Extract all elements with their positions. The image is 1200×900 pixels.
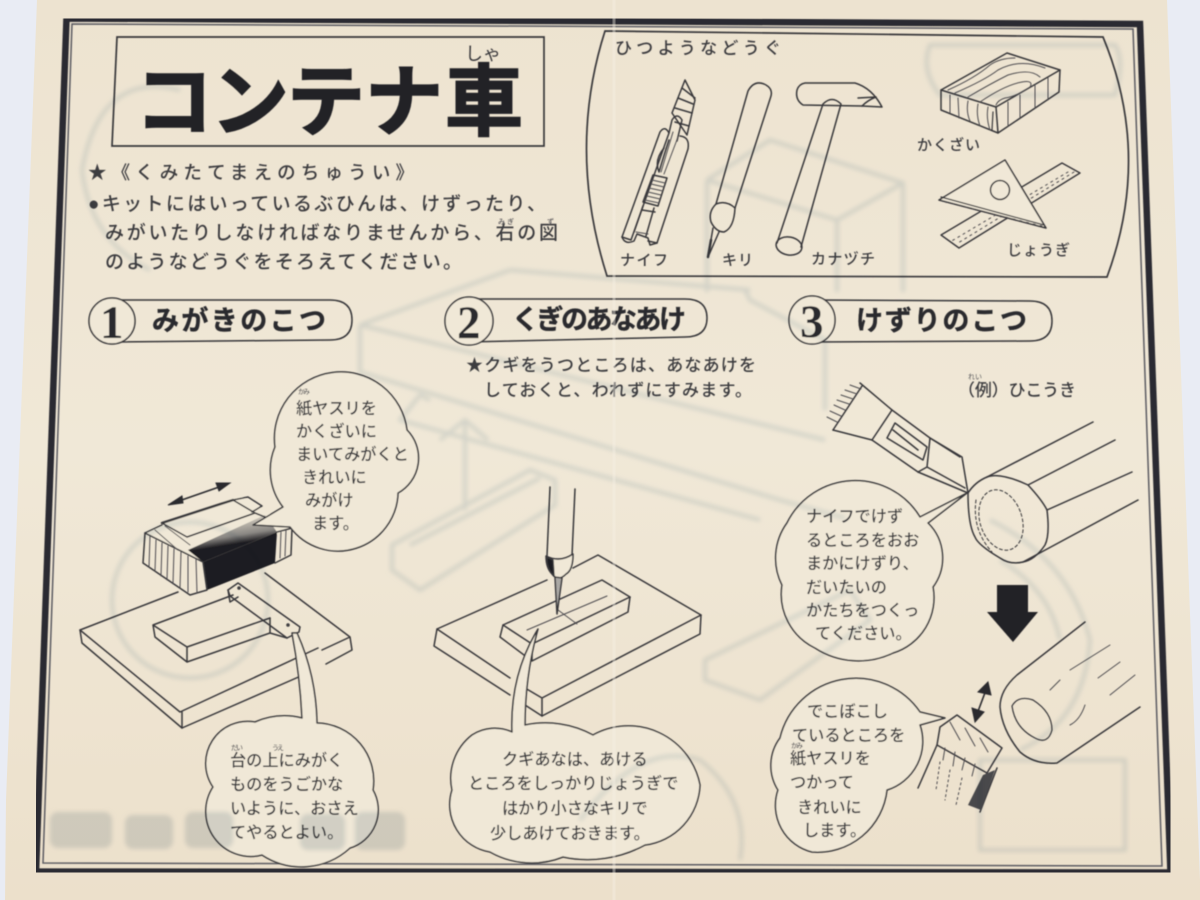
callout: wrap sandpaper around block — [253, 372, 419, 551]
callout: mark and pre-drill: ところをしっかりじょうぎで — [468, 775, 678, 793]
icon: hammer — [775, 83, 882, 257]
callout: hold the piece on the base — [206, 633, 378, 867]
tool labels: キリ — [722, 252, 753, 269]
callout: smooth with sandpaper: つかって — [790, 774, 854, 792]
callout: wrap sandpaper around block: かみ — [298, 388, 310, 396]
callout: hold the piece on the base: てやるとよい。 — [230, 824, 343, 842]
step 2 header: nail holes: 2 — [457, 297, 480, 349]
step 2 header: nail holes: くぎのあなあけ — [512, 304, 686, 335]
step 3 header: carving tips — [789, 296, 1052, 348]
step 1 header: polishing tips: 1 — [100, 297, 124, 349]
icon: wood block — [941, 53, 1060, 133]
icon: awl — [708, 83, 771, 257]
callout: wrap sandpaper around block: みがけ — [305, 491, 354, 510]
callout: wrap sandpaper around block: きれいに — [302, 469, 367, 487]
icon: knife — [622, 80, 695, 245]
callout: mark and pre-drill: 少しあけておきます。 — [490, 825, 650, 843]
callout: rough carve with the knife: だいたいの — [806, 579, 887, 597]
base board — [434, 555, 701, 716]
callout: hold the piece on the base: 台の上にみがく — [230, 751, 343, 770]
callout: mark and pre-drill — [450, 629, 700, 863]
example label: plane: れい — [968, 373, 982, 381]
illustration: sanding on a base board — [80, 483, 352, 728]
callout: rough carve with the knife: かたちをつくっ — [806, 602, 919, 620]
small workpiece — [500, 580, 630, 661]
rounded log — [1000, 622, 1140, 763]
callout: smooth with sandpaper: でこぼこし — [807, 703, 888, 721]
small workpiece — [153, 595, 270, 662]
callout: smooth with sandpaper: 紙ヤスリを — [790, 750, 871, 768]
step 2 note: しておくと、われずにすみます。 — [484, 381, 752, 400]
step 3 header: carving tips: けずりのこつ — [856, 306, 1027, 336]
precautions body text — [88, 193, 558, 273]
clamp bar — [228, 583, 300, 638]
step 1 header: polishing tips — [89, 297, 352, 349]
wood block with sandpaper — [143, 495, 292, 595]
callout: rough carve with the knife: まかにけずり、 — [806, 555, 919, 573]
awl — [546, 487, 575, 614]
step 2 note — [466, 356, 756, 400]
illustration: carving with a knife — [827, 383, 1140, 812]
precautions body text: みぎ — [498, 217, 514, 226]
tool labels: カナヅチ — [811, 251, 875, 268]
callout: wrap sandpaper around block: ます。 — [312, 515, 359, 533]
tool labels: かくざい — [917, 136, 980, 154]
title box — [112, 37, 544, 146]
precautions body text: のようなどうぐをそろえてください。 — [105, 251, 462, 273]
callout: smooth with sandpaper: かみ — [791, 742, 803, 750]
base board — [80, 573, 352, 728]
precautions body text: みがいたりしなければなりませんから、右の図 — [105, 222, 558, 244]
callout: wrap sandpaper around block: 紙ヤスリを — [296, 400, 377, 418]
tool labels: ナイフ — [620, 252, 668, 269]
precautions heading: ★《くみたてまえのちゅうい》 — [88, 162, 414, 183]
title reading: しゃ — [465, 44, 501, 64]
callout: mark and pre-drill: クギあなは、あける — [502, 751, 648, 769]
tool labels: じょうぎ — [1007, 242, 1070, 259]
callout: mark and pre-drill: はかり小さなキリで — [502, 800, 648, 818]
paper fold line — [612, 0, 616, 900]
sanding block — [918, 715, 1002, 812]
motion arrow — [972, 682, 991, 722]
callout: rough carve with the knife — [776, 481, 967, 661]
precautions body text: ず — [547, 217, 554, 226]
step 2 header: nail holes — [445, 297, 707, 349]
callout: wrap sandpaper around block: まいてみがくと — [296, 445, 409, 464]
step 2 note: ★クギをうつところは、あなあけを — [466, 356, 756, 375]
callout: smooth with sandpaper — [771, 678, 945, 852]
step 3 header: carving tips: 3 — [800, 296, 824, 348]
callout: smooth with sandpaper: します。 — [803, 822, 866, 840]
title text: コンテナ車 — [135, 58, 523, 146]
callout: hold the piece on the base: いように、おさえ — [230, 800, 359, 818]
motion arrow — [168, 483, 230, 505]
callout: rough carve with the knife: ナイフでけず — [806, 508, 903, 526]
callout: hold the piece on the base: ものをうごかな — [230, 776, 343, 794]
callout: smooth with sandpaper: ているところを — [792, 727, 905, 745]
arrow: next step — [987, 585, 1038, 642]
callout: smooth with sandpaper: きれいに — [797, 799, 862, 817]
callout: rough carve with the knife: てください。 — [815, 625, 912, 643]
step 1 header: polishing tips: みがきのこつ — [152, 305, 326, 336]
callout: wrap sandpaper around block: かくざいに — [296, 422, 377, 441]
callout: rough carve with the knife: るところをおお — [806, 532, 919, 550]
icon: set square and ruler — [939, 160, 1080, 248]
log with dashed target outline — [968, 422, 1138, 563]
knife — [827, 383, 968, 493]
tools heading: ひつようなどうぐ — [615, 39, 781, 58]
tool labels — [620, 136, 1070, 269]
callout: hold the piece on the base: うえ — [272, 744, 284, 752]
panel: required tools — [586, 31, 1129, 277]
example label: plane: （例）ひこうき — [958, 381, 1076, 400]
precautions body text: ●キットにはいっているぶひんは、けずったり、 — [88, 193, 546, 215]
illustration: drilling with an awl — [434, 487, 701, 716]
callout: hold the piece on the base: だい — [231, 744, 243, 752]
